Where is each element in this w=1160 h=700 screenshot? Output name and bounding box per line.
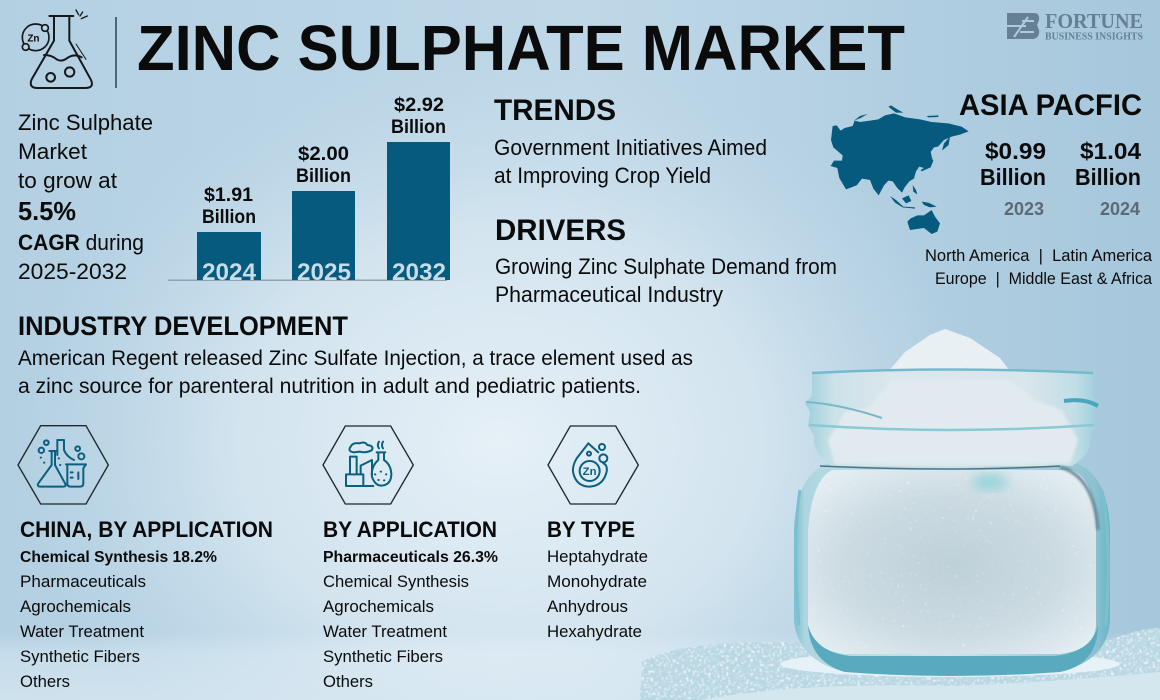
section: China by application: Synthetic Fibers bbox=[20, 647, 140, 666]
drivers block: Growing Zinc Sulphate Demand from bbox=[495, 254, 837, 279]
trends block: Government Initiatives Aimed bbox=[494, 135, 767, 160]
section: China by application: Pharmaceuticals bbox=[20, 572, 146, 591]
salt pile above the rim bbox=[890, 329, 1008, 369]
Asia Pacific stats: 2023 bbox=[1004, 199, 1044, 219]
drivers block: DRIVERS bbox=[495, 214, 626, 247]
jar base bbox=[808, 625, 1098, 676]
rim highlights bbox=[806, 370, 1098, 469]
icon: zinc droplet hexagon: Zn bbox=[583, 466, 597, 478]
bar: 2025: $2.00 bbox=[298, 143, 349, 165]
CAGR text block: 5.5% bbox=[18, 196, 76, 226]
CAGR text block: CAGR during bbox=[18, 230, 144, 255]
other regions: North America | Latin America bbox=[925, 247, 1153, 265]
section: by type: BY TYPE bbox=[547, 517, 635, 542]
other regions bbox=[925, 247, 1153, 288]
section: by application: Chemical Synthesis bbox=[323, 572, 469, 591]
icon: zinc droplet hexagon bbox=[548, 426, 638, 504]
salt fill bbox=[808, 470, 1096, 654]
CAGR text block: 2025-2032 bbox=[18, 259, 127, 284]
section: by application: Others bbox=[323, 672, 373, 691]
Asia Pacific stats: Billion bbox=[1075, 164, 1141, 190]
industry development: a zinc source for parenteral nutrition in adult and pediatric patients. bbox=[18, 375, 641, 398]
Asia Pacific stats: $1.04 bbox=[1080, 138, 1141, 164]
section: by application bbox=[323, 517, 498, 691]
bar: 2024: Billion bbox=[202, 206, 256, 228]
industry development bbox=[18, 311, 693, 398]
turquoise glint in the salt bbox=[972, 475, 1008, 489]
bar: 2025: 2025 bbox=[297, 259, 351, 286]
trends block: at Improving Crop Yield bbox=[494, 163, 711, 188]
CAGR text block: Market bbox=[18, 139, 88, 164]
section: China by application: Chemical Synthesis 18.2% bbox=[20, 549, 217, 566]
drivers block bbox=[495, 214, 837, 307]
salt inside neck bbox=[828, 380, 1078, 464]
bar: 2024: 2024 bbox=[202, 259, 257, 286]
title divider bbox=[115, 17, 117, 88]
logo: Fortune Business Insights: FORTUNE bbox=[1045, 9, 1143, 33]
other regions: Europe | Middle East & Africa bbox=[935, 270, 1153, 288]
icon: factory and flask hexagon bbox=[323, 426, 413, 504]
section: by type: Anhydrous bbox=[547, 597, 628, 616]
bar chart bbox=[168, 94, 450, 286]
bar: 2032 bbox=[387, 94, 450, 286]
illustration: salt on the surface bbox=[640, 625, 1160, 700]
industry development: American Regent released Zinc Sulfate Injection, a trace element used as bbox=[18, 347, 693, 370]
CAGR text block: Zinc Sulphate bbox=[18, 110, 153, 135]
bar: 2024 bbox=[197, 184, 261, 286]
jar shoulder shadow bbox=[1060, 467, 1098, 530]
icon: lab glassware hexagon bbox=[18, 426, 108, 504]
bar: 2025: Billion bbox=[296, 165, 351, 187]
section: China by application: Agrochemicals bbox=[20, 597, 131, 616]
section: by application: BY APPLICATION bbox=[323, 517, 497, 542]
Asia Pacific stats bbox=[959, 89, 1142, 219]
Asia Pacific stats: ASIA PACFIC bbox=[959, 89, 1142, 122]
section: by type: Heptahydrate bbox=[547, 547, 648, 566]
salt in front of the jar bbox=[700, 672, 1160, 700]
bar: 2025 bbox=[292, 143, 355, 286]
section: by type bbox=[547, 517, 648, 641]
CAGR text block: to grow at bbox=[18, 168, 118, 193]
industry development: INDUSTRY DEVELOPMENT bbox=[18, 311, 348, 341]
Asia Pacific stats: 2024 bbox=[1100, 199, 1140, 219]
section: by type: Hexahydrate bbox=[547, 622, 642, 641]
jar side reflections bbox=[796, 490, 1108, 625]
Asia Pacific stats: Billion bbox=[980, 164, 1046, 190]
section: by type: Monohydrate bbox=[547, 572, 647, 591]
map: Asia Pacific bbox=[831, 105, 969, 234]
bar: 2032: 2032 bbox=[392, 259, 446, 286]
logo: Fortune Business Insights: BUSINESS INSIGHTS bbox=[1045, 30, 1143, 42]
section: China by application: CHINA, BY APPLICATION bbox=[20, 517, 273, 542]
section: by application: Pharmaceuticals 26.3% bbox=[323, 549, 498, 566]
illustration: glass jar of zinc sulphate bbox=[700, 326, 1160, 700]
icon: zinc flask bbox=[22, 10, 92, 88]
trends block bbox=[494, 94, 767, 188]
drivers block: Pharmaceutical Industry bbox=[495, 282, 723, 307]
section: by application: Water Treatment bbox=[323, 622, 447, 641]
jar body bbox=[794, 462, 1110, 672]
Asia Pacific stats: $0.99 bbox=[985, 138, 1046, 164]
CAGR text block bbox=[18, 110, 153, 284]
jar neck bbox=[805, 369, 1098, 466]
bar: 2032: Billion bbox=[391, 116, 446, 138]
section: China by application: Water Treatment bbox=[20, 622, 144, 641]
section: by application: Agrochemicals bbox=[323, 597, 434, 616]
section: by application: Synthetic Fibers bbox=[323, 647, 443, 666]
logo: Fortune Business Insights bbox=[1006, 9, 1143, 42]
bar: 2032: $2.92 bbox=[394, 94, 444, 116]
title: ZINC SULPHATE MARKET bbox=[137, 12, 905, 84]
section: China by application bbox=[20, 517, 273, 691]
bar: 2024: $1.91 bbox=[204, 184, 253, 206]
icon: zinc flask: Zn bbox=[27, 33, 40, 44]
trends block: TRENDS bbox=[494, 94, 616, 127]
section: China by application: Others bbox=[20, 672, 70, 691]
